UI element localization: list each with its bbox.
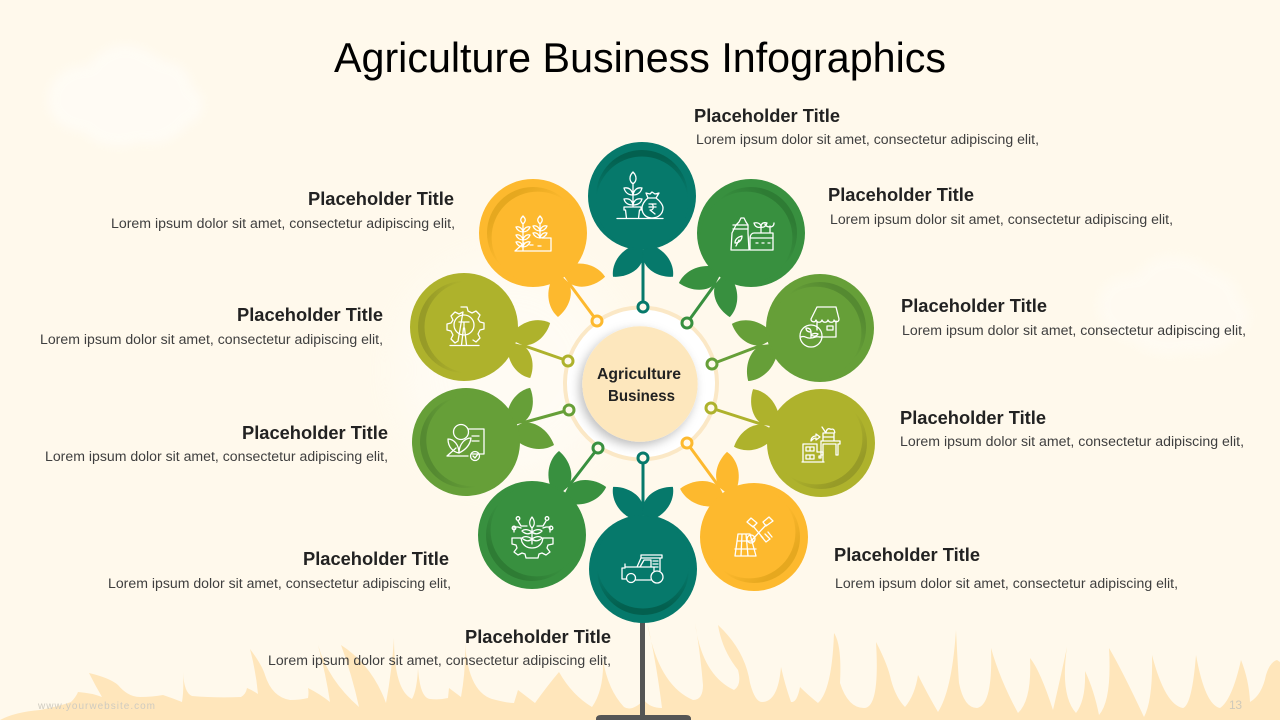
icon: wheat in field [515,216,551,251]
text block: right upper: Placeholder Title [901,296,1047,316]
text block: left lower: Placeholder Title [242,423,388,443]
text block: lower left: Lorem ipsum dolor sit amet, consectetur adipiscing elit, [108,576,451,591]
text block: right upper: Lorem ipsum dolor sit amet, consectetur adipiscing elit, [902,323,1246,338]
text block: top: Lorem ipsum dolor sit amet, consectetur adipiscing elit, [696,132,1039,147]
hub label [597,366,681,405]
soft glow behind the wheel [400,260,620,480]
text block: top [694,106,1039,147]
background grass [0,622,1280,720]
text block: lower left: Placeholder Title [303,549,449,569]
text block: right lower: Placeholder Title [900,408,1046,428]
text block: left lower [45,423,388,464]
node: light green left [400,376,574,508]
text block: upper left: Placeholder Title [308,189,454,209]
cloud: right [1098,256,1249,355]
tree trunk and base [596,620,691,720]
text block: upper left [111,189,455,231]
icon: plant on gear with circuits [512,517,553,558]
text block: top: Placeholder Title [694,106,840,126]
text block: upper left: Lorem ipsum dolor sit amet, consectetur adipiscing elit, [111,216,455,231]
text block: upper right: Placeholder Title [828,185,974,205]
cloud: upper left [48,45,203,146]
icon: plant and money bag [617,172,663,218]
icon: leaves and checked document [447,424,484,460]
title: Agriculture Business Infographics [334,34,946,81]
text block: left lower: Lorem ipsum dolor sit amet, consectetur adipiscing elit, [45,449,388,464]
node: light green right [707,252,896,404]
node: green upper right [675,157,827,328]
text block: upper right [828,185,1173,227]
hub label: Agriculture [597,366,681,383]
text block: right upper [901,296,1246,338]
text block: left upper: Lorem ipsum dolor sit amet, consectetur adipiscing elit, [40,332,383,347]
text block: bottom: Placeholder Title [465,627,611,647]
text block: lower right: Lorem ipsum dolor sit amet, consectetur adipiscing elit, [835,576,1178,591]
node: yellow lower right [678,438,830,613]
icon: solar panel and crossed tools [735,517,773,556]
hub label: Business [608,388,675,405]
text block: lower left [108,549,451,591]
text block: left upper: Placeholder Title [237,305,383,325]
node: olive left [410,273,573,382]
icon: market stall and buildings [802,427,840,462]
node: green lower left [456,443,608,611]
text block: bottom [268,627,611,668]
icon: tractor [622,555,663,583]
text block: right lower: Lorem ipsum dolor sit amet, consectetur adipiscing elit, [900,434,1244,449]
node: olive right [706,367,897,519]
node: yellow upper left [457,157,609,326]
icon: gear with tower [447,307,484,346]
node: teal bottom [589,453,697,623]
footer website: www.yourwebsite.com [37,701,155,712]
text block: upper right: Lorem ipsum dolor sit amet, consectetur adipiscing elit, [830,212,1173,227]
text block: right lower [900,408,1244,449]
text block: bottom: Lorem ipsum dolor sit amet, consectetur adipiscing elit, [268,653,611,668]
text block: lower right: Placeholder Title [834,545,980,565]
page number: 13 [1229,698,1242,712]
icon: shop and sprout [800,307,839,347]
icon: seed bag and planter [731,218,774,250]
node: teal top [588,142,696,312]
text block: left upper [40,305,383,347]
centre hub [565,308,717,460]
text block: lower right [834,545,1178,591]
